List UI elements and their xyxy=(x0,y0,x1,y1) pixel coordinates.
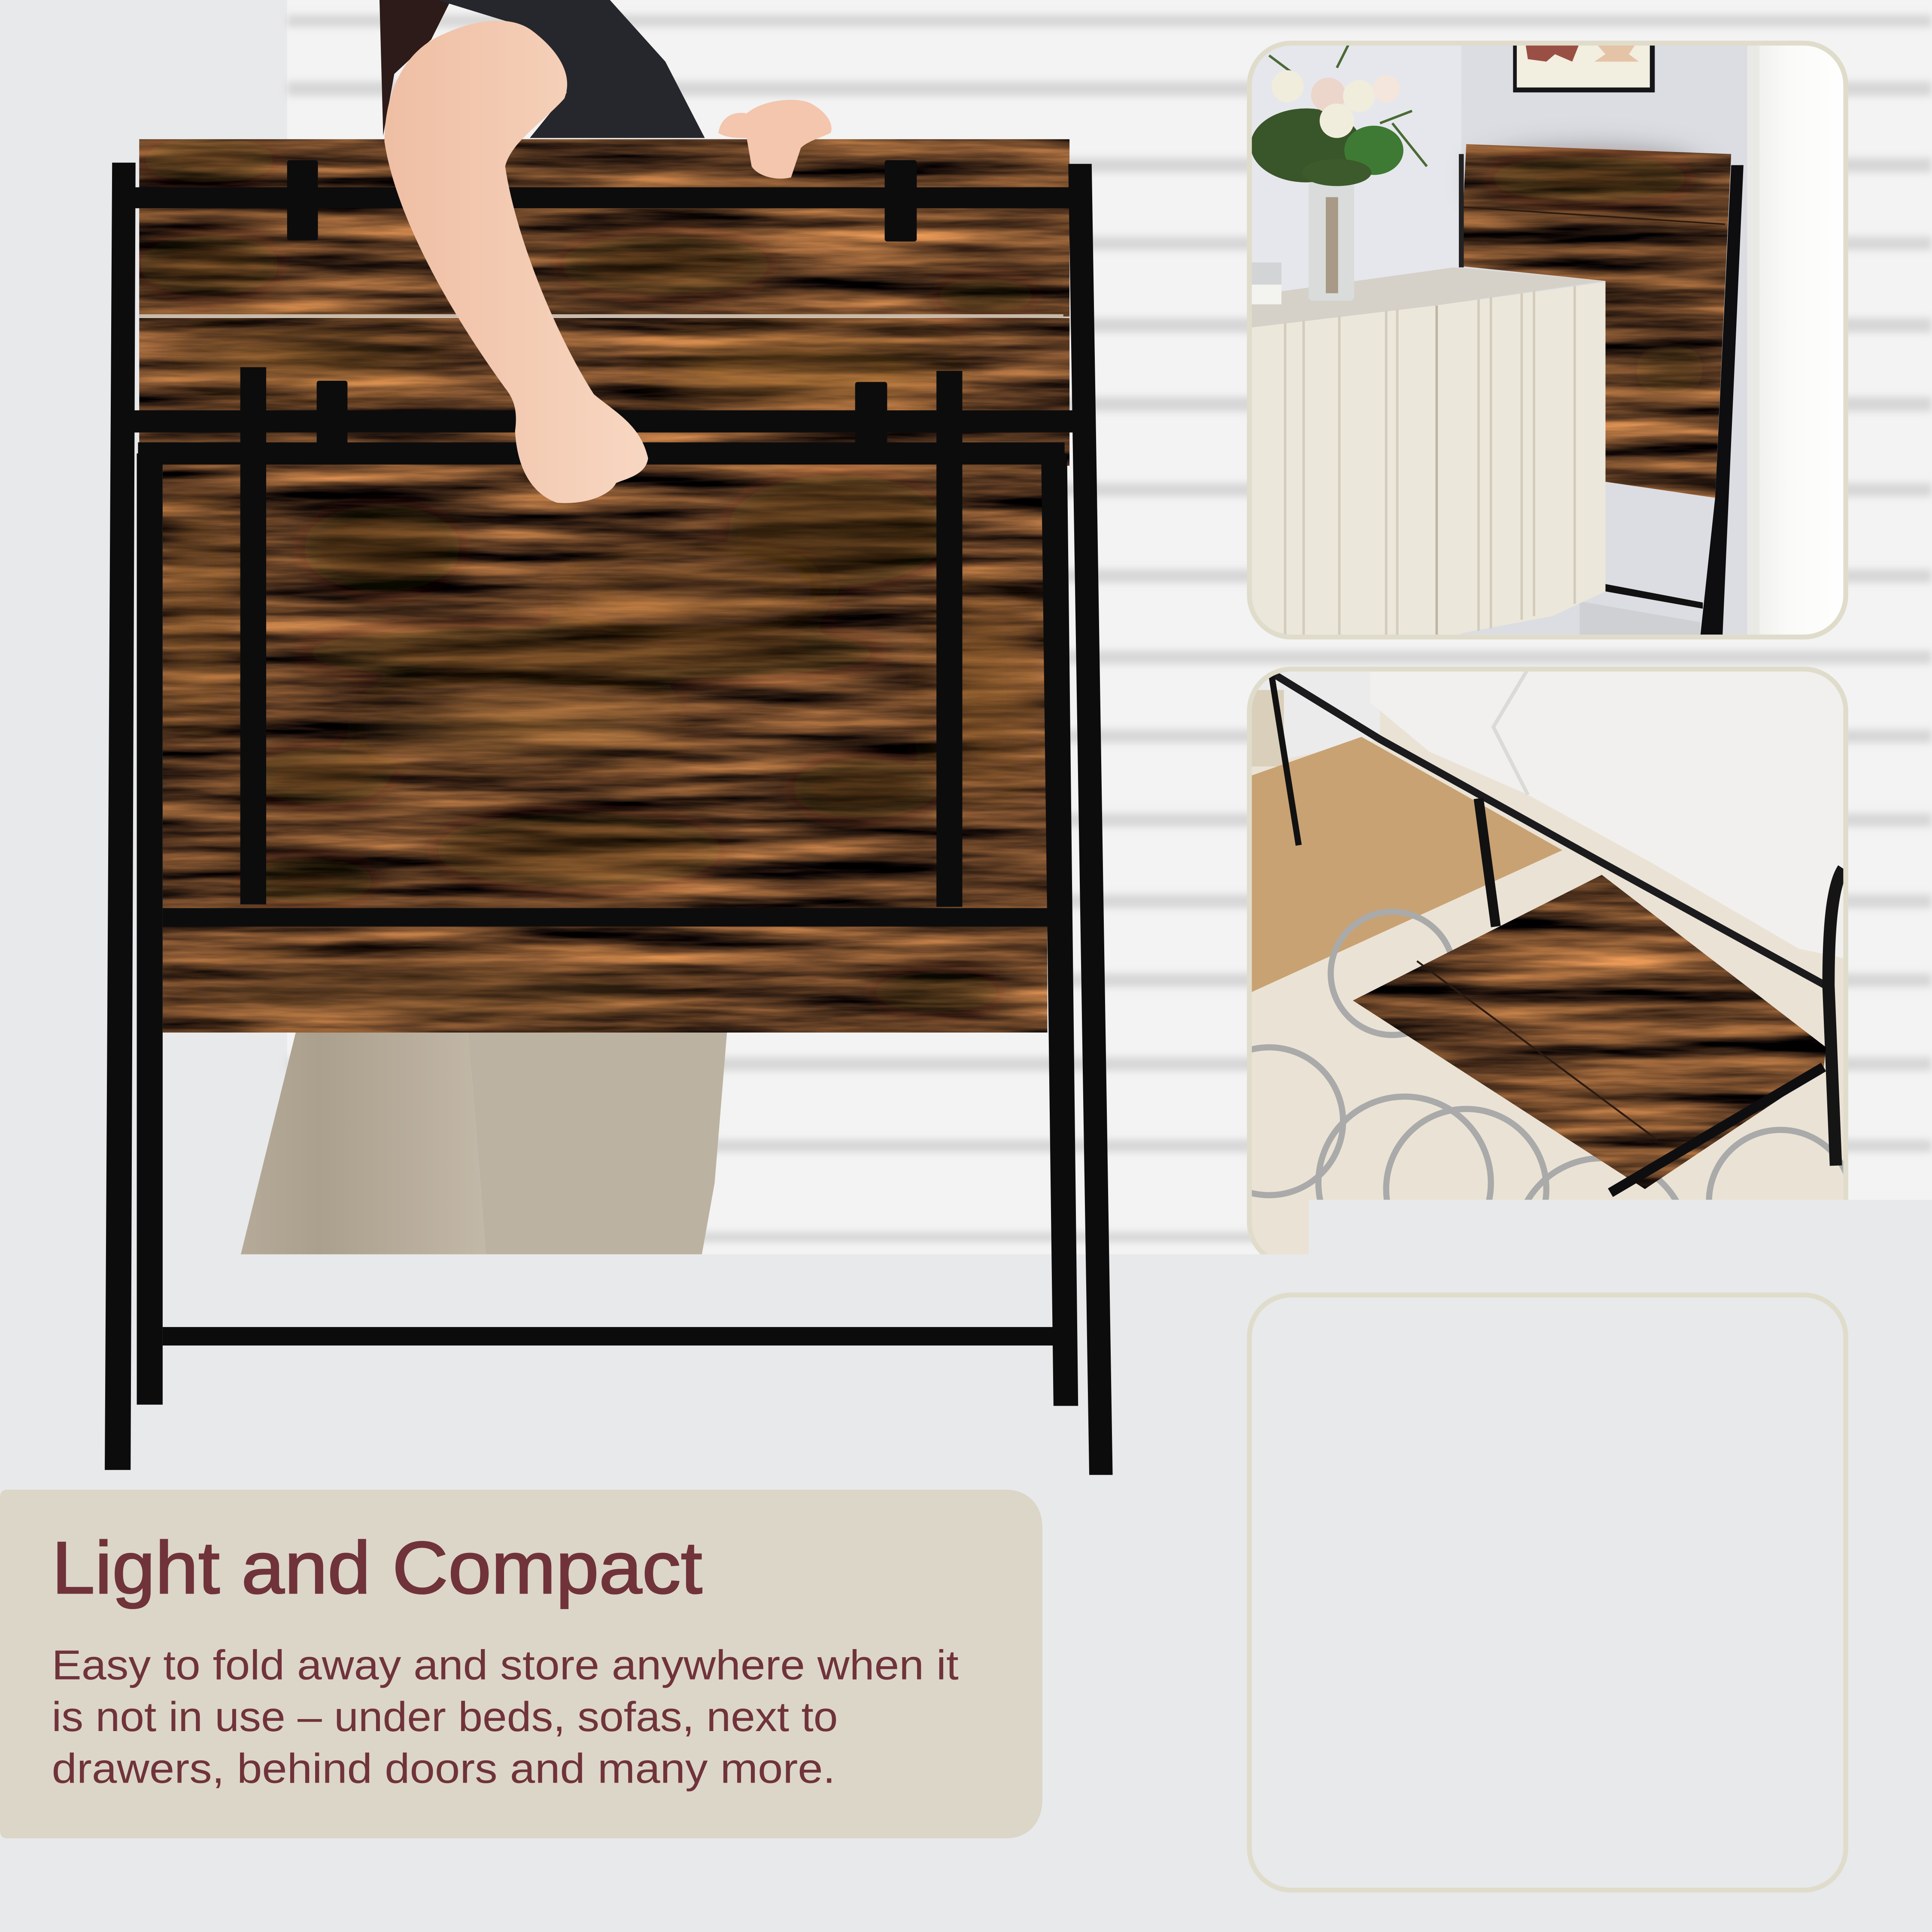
right folding strap xyxy=(936,371,962,907)
folded table: black metal frame xyxy=(105,160,1113,1475)
background: left wall xyxy=(0,0,287,1343)
photo panel: table stored under bed xyxy=(1195,669,1852,1331)
shoe xyxy=(146,1454,234,1488)
lower cross bar xyxy=(163,908,1048,927)
low bar xyxy=(1605,584,1703,609)
person: hair and shirt xyxy=(380,0,705,138)
photo panel: table stored under sofa xyxy=(1249,1294,1910,1916)
person: arm and hand over table xyxy=(384,21,832,503)
panel gap line xyxy=(139,314,1063,317)
top cross bar xyxy=(134,187,1072,208)
bouquet flowers xyxy=(1272,70,1400,138)
curtain shade xyxy=(1747,43,1759,637)
board joint xyxy=(1417,961,1657,1140)
left thin leg xyxy=(1459,154,1464,267)
middle right bracket xyxy=(855,382,887,444)
inner left leg xyxy=(137,453,163,1405)
white bedding xyxy=(1370,669,1846,959)
cabinet top xyxy=(1249,267,1605,328)
corner wall xyxy=(1461,43,1757,637)
black shirt xyxy=(437,0,705,138)
left folding strap xyxy=(240,367,266,905)
board glow patch xyxy=(1466,1565,1639,1663)
wooden floor xyxy=(1249,737,1562,993)
lower wood panel xyxy=(163,462,1047,1033)
pillow xyxy=(1249,1296,1380,1435)
person: trousers xyxy=(146,1033,747,1491)
middle left bracket xyxy=(317,381,347,445)
wood board under sofa xyxy=(1333,1479,1741,1805)
wall xyxy=(1249,43,1461,637)
rug xyxy=(1249,1295,1846,1890)
background: baseboard xyxy=(0,1343,1932,1437)
books xyxy=(1249,262,1282,304)
bedding fold xyxy=(1493,669,1528,795)
wood board on rug xyxy=(1353,875,1826,1189)
bedside drawer xyxy=(1249,690,1284,766)
board black bar xyxy=(1524,1501,1814,1807)
cabinet front xyxy=(1249,282,1605,637)
panel border xyxy=(1249,43,1846,637)
pillow second xyxy=(1353,1295,1460,1349)
sofa shadow xyxy=(1275,1398,1676,1713)
inner right leg xyxy=(1041,453,1078,1406)
folded table: wooden top xyxy=(136,138,1069,1033)
heading: Light and Compact xyxy=(52,1527,702,1609)
bouquet foliage xyxy=(1251,43,1427,186)
background: window sill xyxy=(690,1282,1932,1343)
board black bar xyxy=(1610,1067,1823,1193)
bed leg right xyxy=(1829,869,1843,1166)
bed leg left xyxy=(1272,675,1299,845)
framed picture xyxy=(1513,43,1655,92)
body text xyxy=(52,1642,959,1792)
curtain xyxy=(1750,43,1848,637)
middle wood panel xyxy=(139,318,1069,466)
body text: drawers, behind doors and many more. xyxy=(52,1745,835,1792)
inner top cross bar xyxy=(138,442,1065,465)
board dark patches xyxy=(1479,156,1707,394)
middle cross bar xyxy=(134,410,1073,432)
foot cross bar xyxy=(163,1327,1055,1346)
background: floor reflection xyxy=(1047,1479,1245,1663)
photo panel: table stored behind cabinet xyxy=(1249,43,1848,637)
top left bracket xyxy=(287,160,318,240)
bed frame xyxy=(1272,673,1826,986)
background: window blinds xyxy=(287,15,1932,1242)
body text: is not in use – under beds, sofas, next to xyxy=(52,1693,838,1740)
right trouser leg xyxy=(468,1033,747,1491)
board edge line xyxy=(1461,207,1725,224)
black leg xyxy=(1700,165,1744,636)
hand on top edge xyxy=(718,100,832,179)
rug pattern xyxy=(1195,912,1852,1331)
wood board leaning on wall xyxy=(1461,144,1731,498)
wood shading blotches xyxy=(136,138,1047,1012)
bed leg middle xyxy=(1479,799,1496,927)
wall and base xyxy=(1249,669,1846,1264)
panel border xyxy=(1249,1295,1846,1890)
body text: Easy to fold away and store anywhere when it xyxy=(52,1642,959,1689)
top right bracket xyxy=(885,160,917,241)
rug pattern xyxy=(1312,1294,1910,1916)
panel border xyxy=(1249,669,1846,1264)
text card xyxy=(0,1490,1042,1838)
cabinet fluting xyxy=(1285,286,1575,637)
outer right leg xyxy=(1068,164,1113,1475)
skirting xyxy=(1580,601,1700,637)
sofa xyxy=(1249,1295,1740,1731)
wall xyxy=(1249,669,1380,766)
background: floor xyxy=(0,1437,1932,1932)
vase xyxy=(1309,182,1354,301)
outer left leg xyxy=(105,163,136,1470)
thin bar xyxy=(1635,1433,1789,1516)
